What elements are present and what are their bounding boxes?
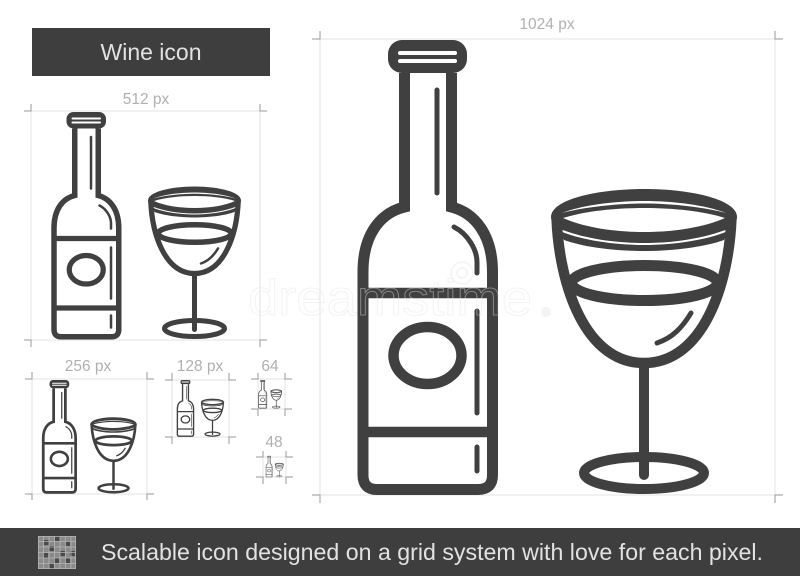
size label: 256 px: 256 px [65,358,112,375]
title banner [32,28,270,76]
frame: 64 px grid [251,373,292,416]
icon: wine bottle and glass, 1024 px [363,40,737,490]
frame: 48 px grid [256,451,293,484]
footer bar [0,528,800,576]
title banner: Wine icon [101,39,201,65]
icon: wine bottle and glass, 64 px [259,380,282,408]
frame: 512 px grid [24,104,267,347]
icon: pixel grid [38,536,76,569]
size label: 64: 64 [261,358,279,375]
icon: wine bottle and glass, 512 px [54,112,241,337]
icon: wine bottle and glass, 48 px [266,456,284,477]
icon: wine bottle and glass, 256 px [43,380,137,492]
watermark: dreamstime [248,270,532,326]
frame: 128 px grid [165,373,236,444]
size label: 512 px: 512 px [123,91,170,108]
frame: 1024 px grid [312,31,783,503]
footer caption: Scalable icon designed on a grid system with love for each pixel. [101,539,763,565]
size label: 128 px: 128 px [177,358,224,375]
size label: 48: 48 [265,434,283,451]
size label: 1024 px: 1024 px [519,16,575,33]
icon: wine bottle and glass, 128 px [177,380,224,436]
frame: 256 px grid [25,372,154,500]
